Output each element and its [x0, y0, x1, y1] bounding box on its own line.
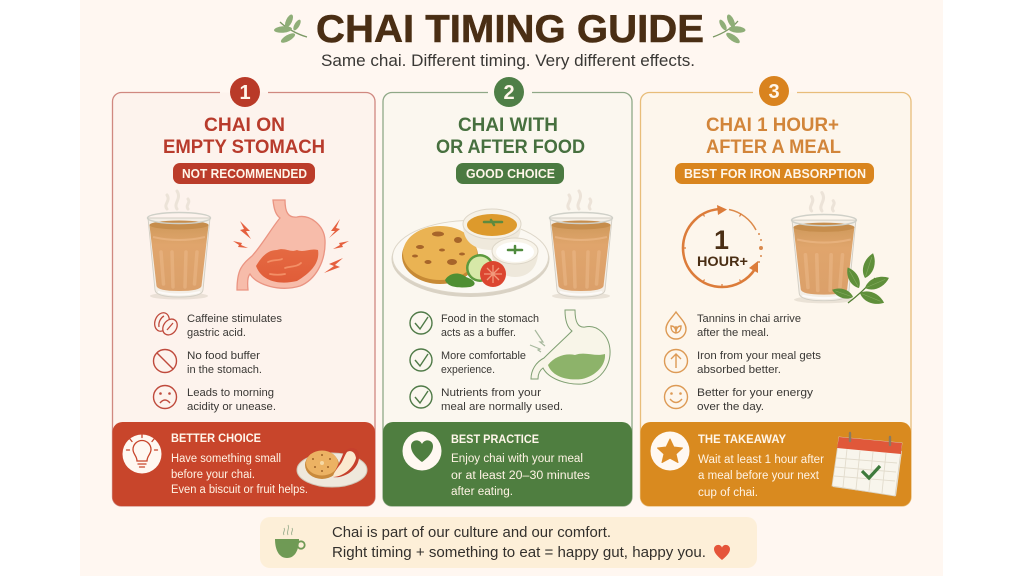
callout: the takeaway: [640, 422, 911, 506]
panel: chai with or after food: [383, 77, 632, 506]
callout: better choice: [112, 422, 375, 506]
icon: left leaf sprig: [274, 13, 307, 45]
heading: chai with or after food: CHAI WITH: [458, 114, 558, 136]
badge: good choice: GOOD CHOICE: [466, 167, 555, 181]
subtitle: Same chai. Different timing. Very different effects.: [321, 52, 695, 70]
icon: heart: [714, 545, 730, 560]
icon: glass of chai: [550, 191, 612, 300]
number badge 2: [494, 77, 524, 107]
panel: chai 1 hour after a meal: [640, 76, 911, 506]
heading: chai 1 hour after a meal: AFTER A MEAL: [706, 136, 841, 158]
icon: star: [650, 432, 690, 470]
number badge 1: [230, 77, 260, 107]
callout: closing message: Chai is part of our culture and our comfort.: [332, 525, 611, 541]
icon: one hour clock: 1: [714, 225, 729, 255]
bullet: morning acidity: acidity or unease.: [187, 401, 276, 413]
bullet: comfortable: experience.: [441, 364, 495, 376]
bullet: food as buffer: [410, 312, 539, 339]
icon: pain bolts: [233, 219, 349, 273]
number badge 2: 2: [503, 82, 515, 104]
icon: one hour clock: HOUR+: [697, 253, 748, 269]
badge: best for iron absorption: [675, 163, 874, 184]
bullet: nutrients: [410, 386, 563, 413]
bullet: no food buffer: in the stomach.: [187, 364, 262, 376]
callout: best practice: Enjoy chai with your meal: [451, 453, 583, 465]
number badge 3: [759, 76, 789, 106]
icon: calendar with check: [832, 433, 902, 496]
number badge 3: 3: [768, 81, 780, 103]
callout: the takeaway: Wait at least 1 hour after: [698, 454, 824, 466]
bullet: caffeine: gastric acid.: [187, 327, 246, 339]
callout: the takeaway: a meal before your next: [698, 470, 820, 482]
icon: light bulb: [122, 434, 162, 474]
bullet: caffeine: [152, 311, 282, 339]
heading: chai on empty stomach: [163, 114, 325, 158]
icon: plate of food: [392, 209, 550, 297]
bullet: food as buffer: acts as a buffer.: [441, 327, 516, 339]
badge: not recommended: [173, 163, 315, 184]
callout: best practice: [383, 422, 632, 506]
heading: chai on empty stomach: EMPTY STOMACH: [163, 136, 325, 158]
heading: chai 1 hour after a meal: CHAI 1 HOUR+: [706, 114, 839, 136]
bullet: iron absorption: Iron from your meal gets: [697, 350, 822, 362]
bullet: tannins: [666, 312, 801, 339]
bullet: iron absorption: absorbed better.: [697, 364, 781, 376]
bullet: comfortable: More comfortable: [441, 350, 526, 362]
bullet: energy: [664, 386, 814, 413]
callout: the takeaway: cup of chai.: [698, 487, 758, 499]
bullet: food as buffer: Food in the stomach: [441, 313, 539, 325]
icon: one hour clock: [683, 205, 763, 287]
heading: chai with or after food: [436, 114, 585, 158]
bullet: morning acidity: Leads to morning: [187, 387, 274, 399]
callout: better choice: BETTER CHOICE: [171, 433, 261, 445]
callout: better choice: Have something small: [171, 453, 281, 465]
callout: best practice: after eating.: [451, 486, 513, 498]
callout: closing message: [260, 517, 757, 568]
bullet: energy: over the day.: [697, 401, 764, 413]
callout: best practice: BEST PRACTICE: [451, 434, 539, 446]
bullet: morning acidity: [154, 386, 276, 413]
bullet: no food buffer: No food buffer: [187, 350, 260, 362]
bullet: caffeine: Caffeine stimulates: [187, 313, 282, 325]
panel: chai on empty stomach: [112, 77, 375, 506]
bullet: iron absorption: [664, 350, 822, 376]
bullet: comfortable: [410, 349, 526, 376]
icon: glass of chai: [148, 191, 210, 300]
icon: tea leaves: [831, 252, 891, 308]
icon: plate with biscuit and apple: [297, 448, 367, 487]
bullet: nutrients: meal are normally used.: [441, 401, 563, 413]
bullet: energy: Better for your energy: [697, 387, 814, 399]
callout: the takeaway: THE TAKEAWAY: [698, 434, 786, 446]
badge: best for iron absorption: BEST FOR IRON ABSORPTION: [684, 167, 866, 181]
icon: calm stomach: [530, 310, 610, 384]
callout: best practice: or at least 20–30 minutes: [451, 470, 590, 482]
bullet: tannins: after the meal.: [697, 327, 769, 339]
callout: closing message: Right timing + something to eat = happy gut, happy you.: [332, 545, 706, 561]
callout: better choice: before your chai.: [171, 469, 255, 481]
title: CHAI TIMING GUIDE: [316, 8, 704, 51]
callout: better choice: Even a biscuit or fruit helps.: [171, 484, 308, 496]
heading: chai on empty stomach: CHAI ON: [204, 114, 285, 136]
bullet: nutrients: Nutrients from your: [441, 387, 541, 399]
icon: right leaf sprig: [713, 13, 746, 45]
icon: irritated stomach: [237, 200, 325, 290]
badge: good choice: [456, 163, 564, 184]
badge: not recommended: NOT RECOMMENDED: [182, 167, 307, 181]
heading: chai 1 hour after a meal: [706, 114, 841, 158]
heading: chai with or after food: OR AFTER FOOD: [436, 136, 585, 158]
icon: heart: [402, 432, 442, 470]
bullet: tannins: Tannins in chai arrive: [697, 313, 801, 325]
number badge 1: 1: [239, 82, 251, 104]
icon: glass of chai: [792, 193, 856, 303]
icon: green cup: [275, 525, 305, 558]
bullet: no food buffer: [154, 350, 262, 376]
